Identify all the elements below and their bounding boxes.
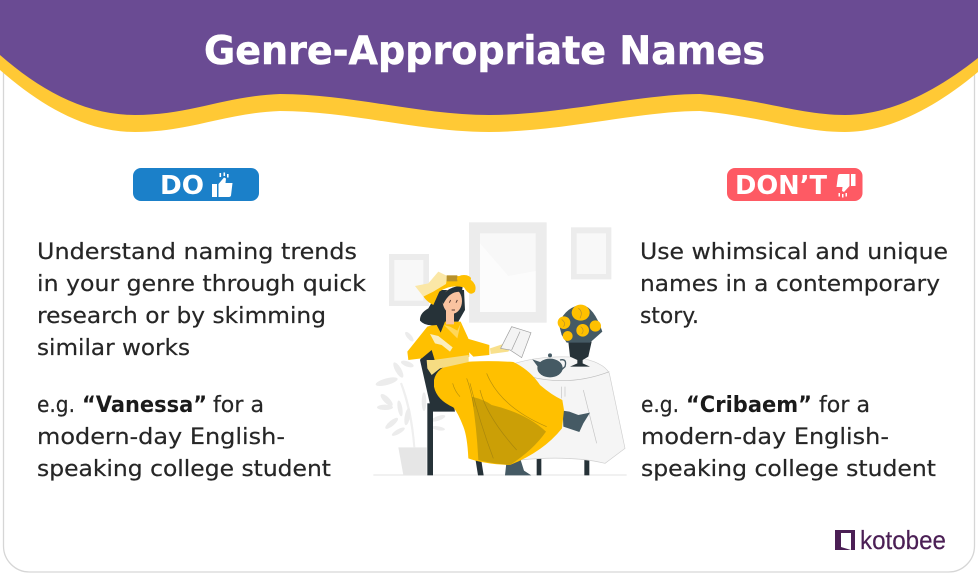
hat (415, 272, 476, 305)
DO badge (133, 168, 259, 201)
text block: do example: “Vanessa” (82, 393, 207, 418)
text block: don't advice: story. (640, 304, 699, 329)
chair (420, 342, 484, 475)
icon: thumbs up (212, 172, 232, 197)
text block: do advice: research or by skimming (37, 304, 326, 329)
text block: do example: for a (213, 393, 264, 418)
vase and flowers (558, 305, 602, 367)
text block: do advice: in your genre through quick (37, 272, 366, 297)
wall frames (389, 222, 611, 323)
text block: don't example: for a (819, 393, 870, 418)
head and hair (420, 286, 465, 333)
text block: don't advice (640, 240, 948, 329)
text block: do example: e.g. (37, 393, 75, 418)
dress (407, 322, 564, 465)
text block: do advice: similar works (37, 336, 190, 361)
boots (505, 411, 590, 475)
bodice (407, 322, 469, 367)
table (510, 357, 625, 475)
icon: thumbs down (836, 174, 856, 198)
teapot (532, 353, 566, 377)
title: Genre-Appropriate Names (204, 29, 765, 74)
text block: do example: speaking college student (37, 457, 331, 482)
header banner (0, 0, 978, 132)
DO badge: DO (160, 171, 204, 201)
text block: do advice: Understand naming trends (37, 240, 357, 265)
DON'T badge (727, 168, 862, 201)
illustration: woman reading at a table (373, 222, 627, 476)
DON'T badge: DON’T (735, 171, 827, 201)
text block: don't example: e.g. (641, 393, 679, 418)
text block: don't example: “Cribaem” (686, 393, 812, 418)
text block: don't advice: names in a contemporary (640, 272, 940, 297)
text block: do example: modern-day English- (37, 425, 285, 450)
logo: kotobee: kotobee (860, 525, 946, 555)
book (501, 327, 531, 358)
text block: don't advice: Use whimsical and unique (640, 240, 948, 265)
text block: don't example: speaking college student (641, 457, 936, 482)
belt (427, 355, 469, 375)
text block: don't example: modern-day English- (641, 425, 889, 450)
text block: do example (37, 393, 331, 482)
plant (375, 331, 446, 475)
text block: do advice (37, 240, 366, 361)
yellow wave (0, 0, 978, 132)
text block: don't example (641, 393, 936, 482)
floor (373, 474, 627, 476)
purple wave (0, 0, 978, 115)
gloves (430, 334, 453, 352)
icon: book mark (835, 530, 855, 550)
